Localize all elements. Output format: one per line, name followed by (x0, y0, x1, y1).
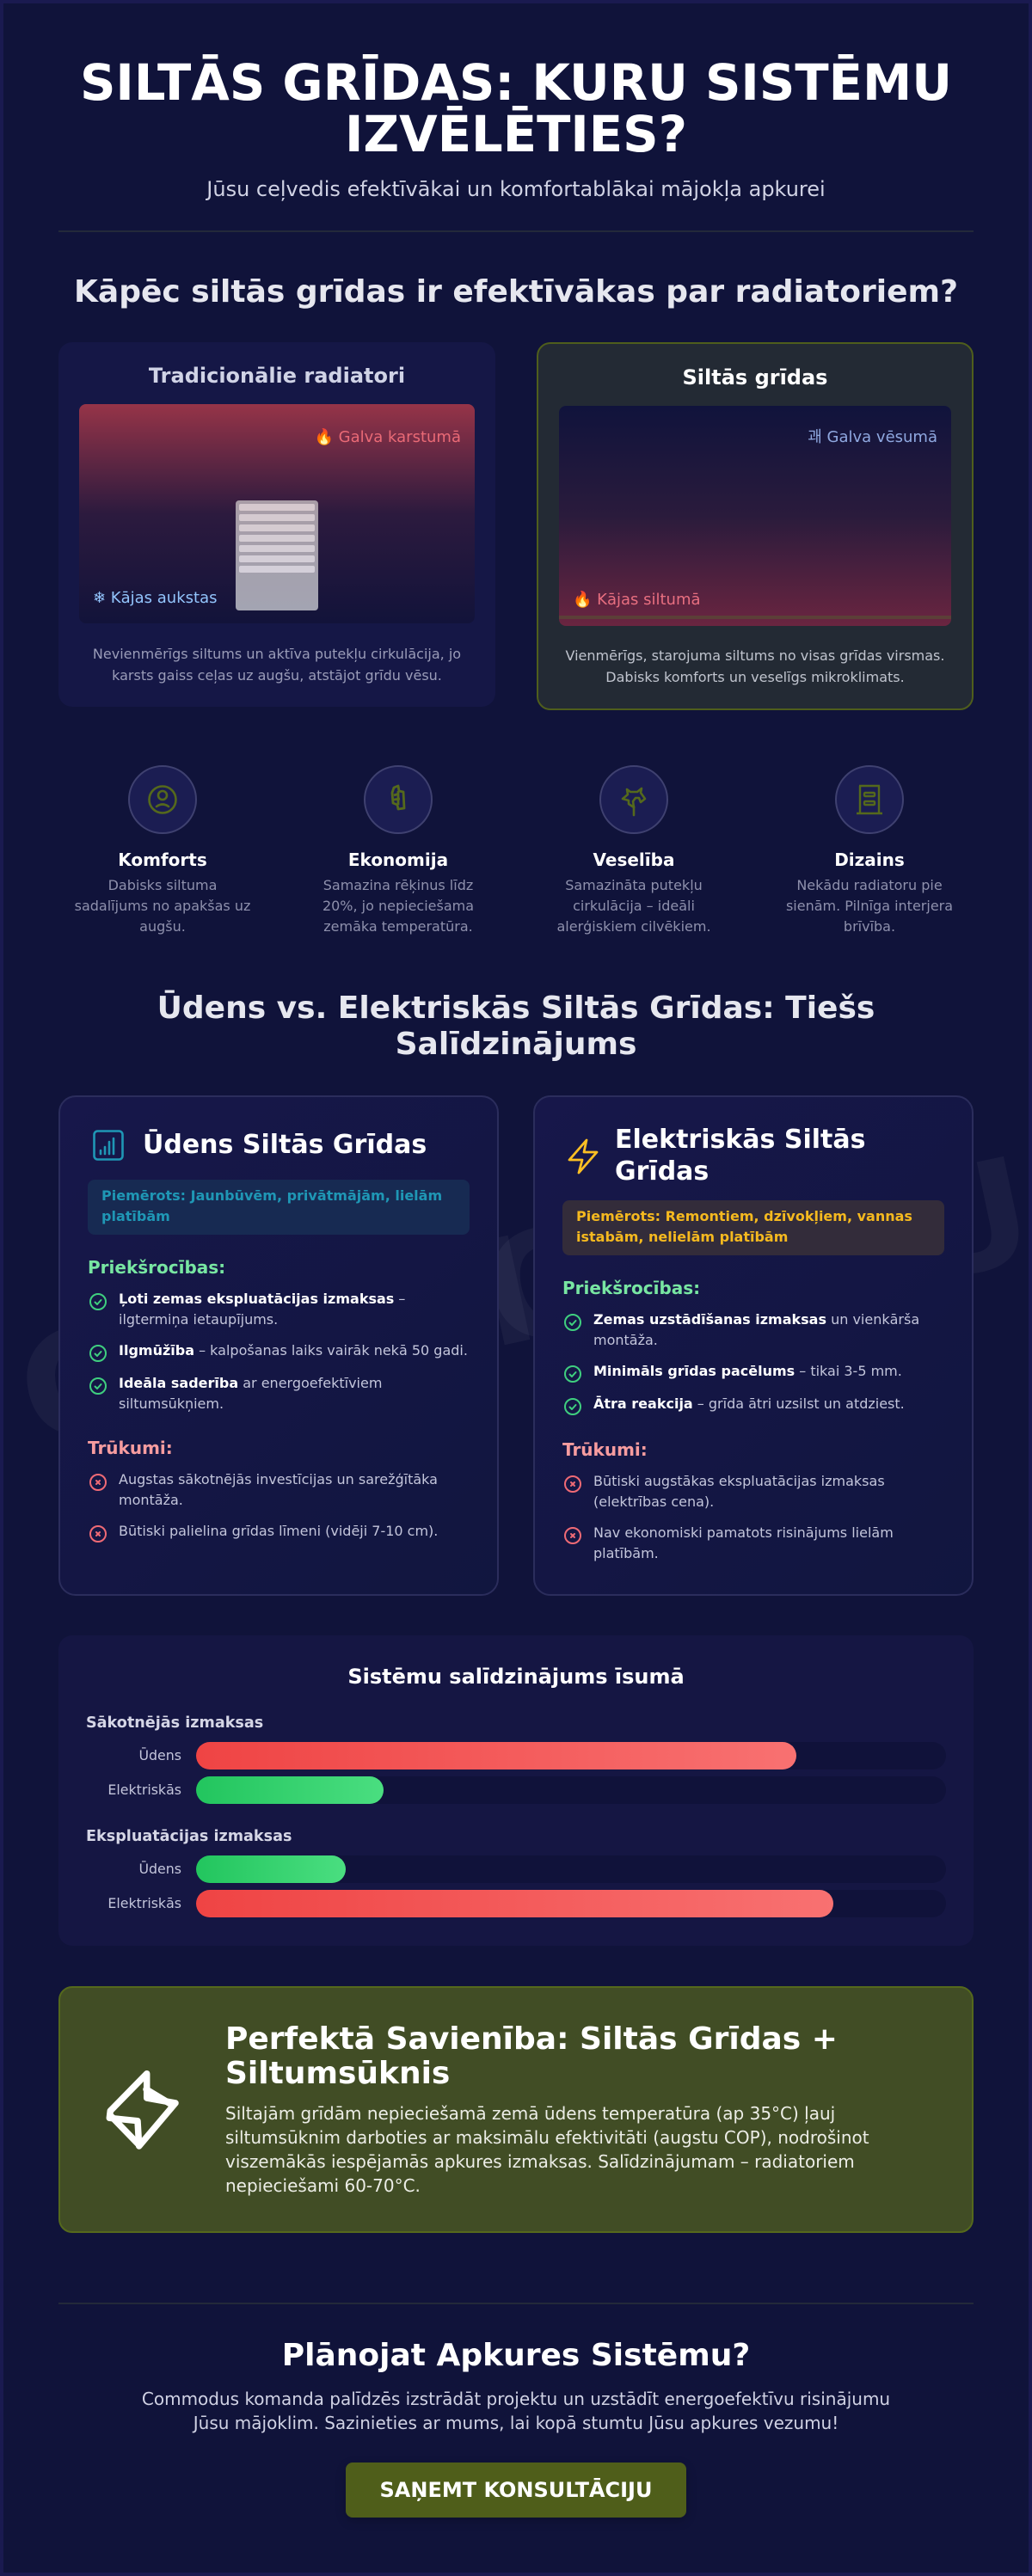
card title: Elektriskās Siltās (615, 1125, 865, 1155)
cta text: Jūsu mājoklim. Sazinieties ar mums, lai kopā stumtu Jūsu apkures vezumu! (194, 2413, 838, 2433)
callout title: Perfektā Savienība: Siltās Grīdas + (225, 2021, 838, 2057)
icon: design (835, 765, 904, 834)
pro item (119, 1375, 382, 1412)
pro item: montāža. (593, 1332, 658, 1348)
chart group: initial cost (86, 1714, 946, 1804)
panel description: Vienmērīgs, starojuma siltums no visas grīdas virsmas. (566, 647, 944, 664)
feature text: Samazināta putekļu (565, 877, 703, 893)
pro item: siltumsūkņiem. (119, 1395, 224, 1412)
cons heading: Trūkumi: (88, 1438, 173, 1458)
feature title: Komforts (118, 849, 207, 870)
icon: heat pump bolt (103, 2065, 186, 2158)
illustration: warm floor room (559, 406, 951, 626)
title: IZVĒLĒTIES? (345, 106, 687, 163)
heading: why floors: Kāpēc siltās grīdas ir efektīvākas par radiatoriem? (74, 274, 958, 310)
bar: electric running 85% (196, 1890, 946, 1917)
callout: heat pump (58, 1986, 974, 2233)
feature: comfort (75, 765, 250, 935)
label: cold feet: ❄ Kājas aukstas (93, 589, 217, 607)
con item: Augstas sākotnējās investīcijas un sarežģītāka (119, 1471, 438, 1487)
panel: comparison chart (58, 1635, 974, 1946)
pro item: ilgtermiņa ietaupījums. (119, 1311, 278, 1328)
feature: design (786, 765, 953, 935)
con item: Nav ekonomiski pamatots risinājums lielām (593, 1524, 894, 1541)
group label: Ekspluatācijas izmaksas (86, 1828, 292, 1845)
pro item (119, 1291, 405, 1328)
panel: water underfloor heating (58, 1095, 499, 1596)
feature text: cirkulācija – ideāli (573, 898, 695, 914)
panel: underfloor heating (537, 342, 974, 710)
suitability badge: Piemērots: Remontiem, dzīvokļiem, vannas (576, 1208, 912, 1224)
bar: water running 20% (196, 1855, 946, 1883)
panel description: karsts gaiss ceļas uz augšu, atstājot grīdu vēsu. (112, 667, 442, 683)
icon: check (89, 1293, 107, 1310)
suitability badge (562, 1200, 944, 1255)
pro item: Ideāla saderība ar energoefektīviem (119, 1375, 382, 1391)
feature text: 20%, jo nepieciešama (322, 898, 474, 914)
suitability badge: istabām, nelielām platībām (576, 1229, 788, 1245)
title (80, 54, 952, 163)
cons list (564, 1473, 894, 1561)
pros list (564, 1311, 919, 1415)
chart title: Sistēmu salīdzinājums īsumā (347, 1665, 685, 1689)
suitability badge (88, 1180, 470, 1235)
feature text: Dabisks siltuma (108, 877, 217, 893)
pros heading: Priekšrocības: (562, 1278, 700, 1298)
feature text: brīvība. (844, 918, 895, 935)
cons heading: Trūkumi: (562, 1439, 648, 1460)
group label: Sākotnējās izmaksas (86, 1714, 263, 1732)
panel description: Nevienmērīgs siltums un aktīva putekļu cirkulācija, jo (93, 646, 461, 662)
icon: comfort (128, 765, 197, 834)
con item (593, 1473, 885, 1510)
con item: Būtiski palielina grīdas līmeni (vidēji 7-10 cm). (119, 1523, 438, 1539)
heading: water vs electric: Ūdens vs. Elektriskās Siltās Grīdas: Tiešs (157, 991, 875, 1026)
callout title (225, 2022, 838, 2091)
icon: cross (564, 1527, 581, 1544)
pro item: Ilgmūžība – kalpošanas laiks vairāk nekā 50 gadi. (119, 1342, 468, 1359)
chart group: running cost (86, 1828, 946, 1917)
icon: check (564, 1398, 581, 1415)
con item (119, 1471, 438, 1508)
callout text (225, 2101, 869, 2198)
feature title: Dizains (834, 849, 905, 870)
con item: (elektrības cena). (593, 1493, 714, 1510)
panel: electric underfloor heating (533, 1095, 974, 1596)
feature title: Ekonomija (348, 849, 448, 870)
icon: water system (93, 1130, 124, 1161)
illustration: radiator room (79, 404, 475, 623)
suitability badge: Piemērots: Jaunbūvēm, privātmājām, lielām (101, 1187, 442, 1204)
icon: lightning bolt (568, 1138, 599, 1175)
feature text: Samazina rēķinus līdz (323, 877, 473, 893)
label: cool head: 괘 Galva vēsumā (808, 428, 937, 446)
cta text (0, 2387, 1032, 2435)
icon: cross (89, 1474, 107, 1491)
bar: electric initial 25% (196, 1776, 946, 1804)
feature text: augšu. (139, 918, 186, 935)
cta button (346, 2463, 686, 2518)
feature text: Nekādu radiatoru pie (796, 877, 943, 893)
icon: health (599, 765, 668, 834)
callout text: siltumsūknim darboties ar maksimālu efektivitāti (augstu COP), nodrošinot (225, 2127, 869, 2148)
icon: radiator (236, 500, 318, 610)
card title: Ūdens Siltās Grīdas (143, 1130, 427, 1160)
pro item: Ātra reakcija – grīda ātri uzsilst un atdziest. (593, 1395, 905, 1412)
panel: radiators (58, 342, 495, 707)
card title (615, 1125, 865, 1187)
bar label: Elektriskās (108, 1782, 181, 1798)
cta text: Commodus komanda palīdzēs izstrādāt projektu un uzstādīt energoefektīvu risinājumu (142, 2389, 890, 2409)
icon: cross (564, 1475, 581, 1493)
feature text: sadalījums no apakšas uz (75, 898, 250, 914)
pro item: Ļoti zemas ekspluatācijas izmaksas – (119, 1291, 405, 1307)
label: hot head: 🔥 Galva karstumā (315, 428, 461, 446)
callout title: Siltumsūknis (225, 2056, 450, 2091)
bar: water initial 80% (196, 1742, 946, 1769)
feature title: Veselība (593, 849, 674, 870)
feature text (556, 877, 711, 935)
bar label: Ūdens (138, 1747, 181, 1763)
subtitle: Jūsu ceļvedis efektīvākai un komfortablākai mājokļa apkurei (206, 177, 826, 201)
panel title: Siltās grīdas (683, 365, 827, 389)
con item: montāža. (119, 1492, 183, 1508)
card title: Grīdas (615, 1156, 709, 1187)
callout text: Siltajām grīdām nepieciešamā zemā ūdens temperatūra (ap 35°C) ļauj (225, 2103, 835, 2124)
cta heading: Plānojat Apkures Sistēmu? (282, 2338, 750, 2373)
heading: water vs electric (157, 991, 875, 1062)
pro item (593, 1311, 919, 1348)
pros list (89, 1291, 468, 1412)
pro item: Zemas uzstādīšanas izmaksas un vienkārša (593, 1311, 919, 1328)
cons list (89, 1471, 438, 1543)
feature text (786, 877, 953, 935)
feature text (322, 877, 474, 935)
bar label: Ūdens (138, 1861, 181, 1877)
icon: check (89, 1377, 107, 1395)
callout text: viszemākās iespējamās apkures izmaksas. Salīdzinājumam – radiatoriem (225, 2151, 855, 2172)
callout text: nepieciešami 60-70°C. (225, 2175, 421, 2196)
feature text: zemāka temperatūra. (323, 918, 473, 935)
cta button: SAŅEMT KONSULTĀCIJU (380, 2478, 652, 2502)
con item: platībām. (593, 1545, 659, 1561)
feature text (75, 877, 250, 935)
icon: cross (89, 1525, 107, 1543)
icon: savings (364, 765, 433, 834)
feature text: sienām. Pilnīga interjera (786, 898, 953, 914)
feature: health (556, 765, 711, 935)
floor strip (559, 616, 951, 619)
panel title: Tradicionālie radiatori (149, 364, 405, 388)
icon: check (564, 1314, 581, 1331)
pros heading: Priekšrocības: (88, 1257, 225, 1278)
label: warm feet: 🔥 Kājas siltumā (573, 591, 701, 609)
feature text: alerģiskiem cilvēkiem. (556, 918, 711, 935)
icon: check (89, 1345, 107, 1362)
pro item: Minimāls grīdas pacēlums – tikai 3-5 mm. (593, 1363, 902, 1379)
heading: water vs electric: Salīdzinājums (396, 1027, 636, 1062)
panel description (93, 646, 461, 684)
panel description: Dabisks komforts un veselīgs mikroklimats. (605, 669, 905, 684)
feature: savings (322, 765, 474, 935)
con item: Būtiski augstākas ekspluatācijas izmaksas (593, 1473, 885, 1489)
icon: check (564, 1365, 581, 1383)
bar label: Elektriskās (108, 1895, 181, 1911)
panel description (566, 647, 944, 684)
con item (593, 1524, 894, 1561)
suitability badge: platībām (101, 1208, 170, 1224)
title: SILTĀS GRĪDAS: KURU SISTĒMU (80, 54, 952, 112)
